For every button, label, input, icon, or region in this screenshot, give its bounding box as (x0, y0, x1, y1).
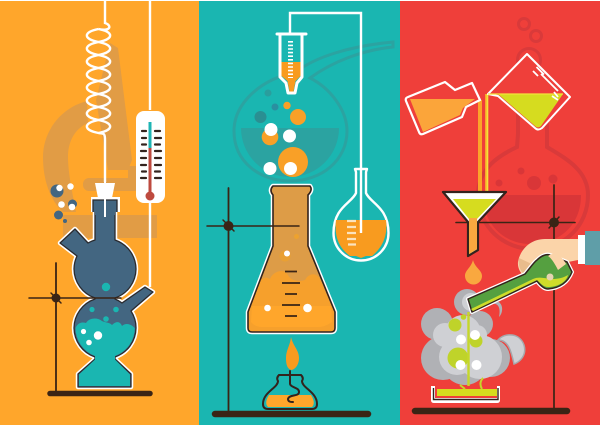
middle: conical flask (248, 186, 335, 332)
icon: funnel (443, 192, 506, 256)
middle: tube from syringe to small flask (290, 13, 361, 172)
middle: flask scale marks (282, 272, 300, 316)
icon: burner flame (286, 337, 299, 370)
right: smoke cloud (421, 289, 525, 385)
middle: floating bubbles (262, 102, 308, 177)
left: double-bulb flask (60, 200, 153, 387)
left: bubbles inside flask (81, 283, 119, 345)
right: green stream (467, 312, 470, 390)
icon: tilted bottle (406, 82, 480, 134)
panel: teal background (199, 1, 400, 425)
icon: falling drop (465, 260, 482, 284)
icon: tilted beaker (488, 54, 570, 130)
left: thermometer wire (149, 0, 151, 287)
panel: red background (400, 1, 600, 425)
right: beaker on stand (431, 378, 500, 403)
icon: thermometer (136, 111, 165, 203)
watermark: red panel flask (478, 18, 588, 249)
middle: flask bubbles (264, 234, 312, 312)
middle: small round flask (334, 169, 388, 260)
middle: clamp arm (207, 220, 299, 231)
middle: ring stand (215, 188, 368, 414)
left: bubbles (50, 183, 77, 223)
middle: flask liquid (249, 271, 334, 331)
icon: shirt cuff and sleeve (578, 231, 600, 265)
left: clamp arm (29, 293, 121, 303)
left: ring stand (50, 263, 150, 394)
left: flask liquid (76, 319, 135, 386)
right: green and white bubbles (448, 314, 482, 370)
watermark: microscope (43, 43, 157, 238)
watermark: round flask (234, 42, 393, 181)
left: tube and coil (87, 0, 110, 182)
right: ring stand (415, 185, 575, 411)
icon: hand holding flask (468, 231, 600, 312)
right: pouring streams (478, 94, 488, 191)
left: stopper (91, 182, 120, 217)
icon: spirit burner (263, 371, 317, 409)
icon: syringe (277, 34, 306, 93)
icon: green flask in hand (468, 255, 572, 312)
panel: orange background (0, 1, 199, 425)
